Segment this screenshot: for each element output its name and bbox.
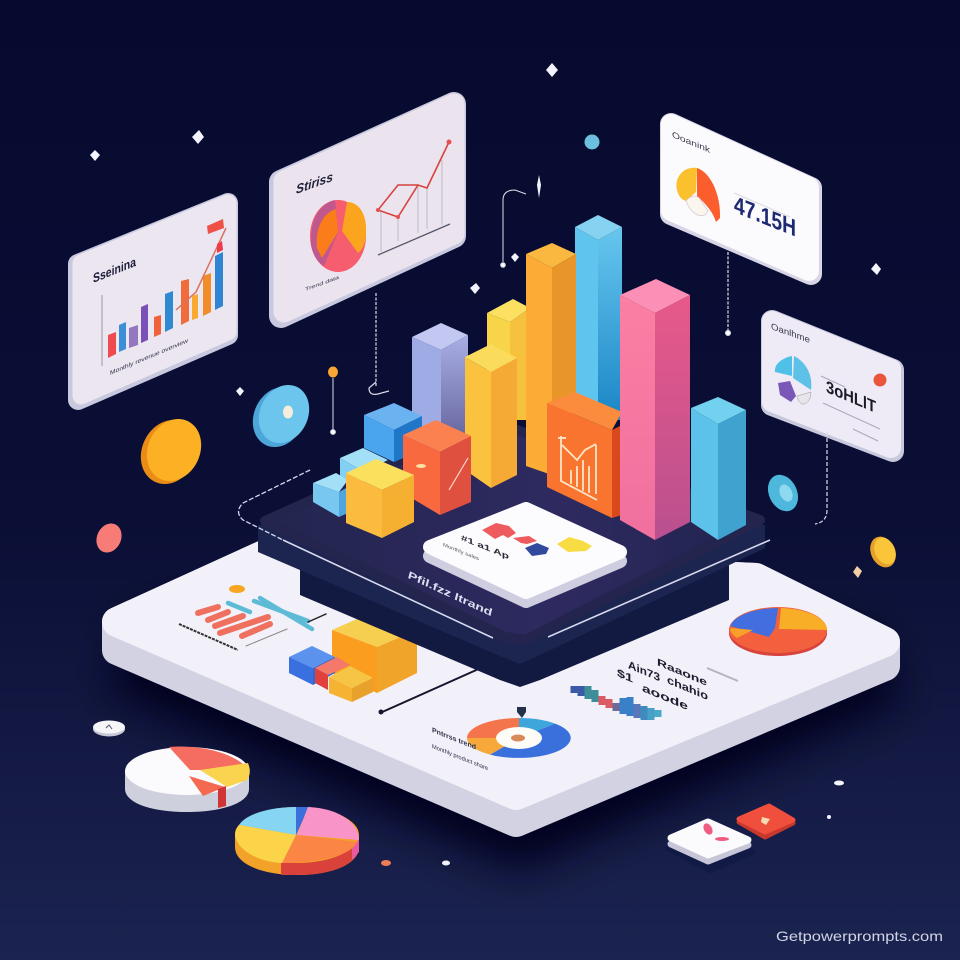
axis (101, 295, 103, 366)
icon: bar chart (558, 436, 597, 500)
card caption: Trend data (305, 275, 339, 293)
bar: red cube (403, 420, 471, 515)
red badge (874, 374, 886, 386)
gauge pie (676, 168, 720, 222)
donut caption text: Pntrrss trend (432, 725, 476, 752)
donut caption text: Monthly product share (432, 743, 488, 773)
bar: tall blue (575, 215, 622, 420)
white base platform (117, 555, 885, 822)
donut caption text (432, 725, 488, 773)
rule lines (734, 193, 790, 217)
platform text block: aoode (642, 682, 688, 713)
card heading: Oanlhme (771, 321, 810, 345)
card heading: Sseinina (93, 254, 136, 286)
card chart marks: Monthly sales (443, 542, 479, 563)
coin: yellow (865, 532, 901, 572)
bar: yellow cube (346, 459, 414, 538)
bars group (313, 215, 746, 540)
card heading: Stiriss (296, 169, 333, 197)
platform frame line (238, 470, 770, 638)
arrow line (378, 663, 492, 714)
card: sales bar chart (78, 203, 228, 400)
bar: front yellow (465, 344, 517, 488)
bar: light blue steps (313, 448, 388, 517)
card: KPI value (671, 124, 811, 274)
bar: lavender (412, 323, 468, 450)
dark platform (238, 420, 770, 687)
bar: teal (691, 397, 746, 540)
disc: blue (243, 377, 318, 456)
bar: pink (620, 279, 690, 540)
top surface (265, 420, 760, 640)
platform text block (617, 657, 708, 713)
white card on dark platform (430, 509, 620, 601)
pie: multicolor (235, 807, 359, 875)
connector lines (331, 190, 827, 524)
bars (108, 252, 223, 358)
disc: teal (762, 470, 804, 516)
card: secondary KPI (771, 321, 893, 451)
platform text block: $1 (617, 667, 634, 686)
token: small white disc (93, 720, 125, 736)
platform mini bars (574, 668, 738, 720)
pie chart (310, 200, 366, 272)
cube group on platform (289, 611, 417, 702)
platform pie (729, 607, 827, 656)
pie: white and red (125, 747, 250, 812)
KPI number: 47.15H (734, 191, 796, 243)
mini bar chart on platform (179, 585, 326, 650)
card chart marks (443, 523, 592, 563)
card heading: Ooanink (672, 129, 711, 155)
platform text block: Ain73 (628, 659, 660, 684)
dot: light blue (584, 134, 600, 150)
coin: pink (92, 519, 126, 557)
lower tier (300, 565, 729, 687)
pie chart (775, 356, 811, 404)
KPI number: 3oHLlT (826, 377, 876, 417)
line chart (376, 140, 452, 255)
tile: red (739, 806, 793, 837)
bar: blue cube (364, 403, 422, 462)
tile: white (668, 822, 752, 870)
trend line (176, 228, 226, 310)
platform shadow (110, 560, 900, 870)
platform text block: chahio (667, 674, 708, 703)
rule lines (821, 376, 880, 441)
bar: tall orange (526, 243, 576, 475)
bar: back yellow (487, 299, 530, 420)
card chart marks: #1 a1 Ap (461, 532, 509, 561)
donut chart (467, 707, 571, 758)
watermark: Getpowerprompts.com (776, 928, 943, 944)
bar: orange block (547, 392, 622, 518)
card caption: Monthly revenue overview (110, 337, 189, 377)
coin: orange (131, 410, 211, 493)
upper tier side (258, 525, 765, 664)
platform text block: Raaone (657, 657, 707, 689)
sparkles (90, 63, 881, 866)
pin: orange marker (328, 366, 338, 378)
platform label: Pfil.fzz Itrand (408, 569, 493, 620)
card: stress pie and line (281, 104, 454, 316)
